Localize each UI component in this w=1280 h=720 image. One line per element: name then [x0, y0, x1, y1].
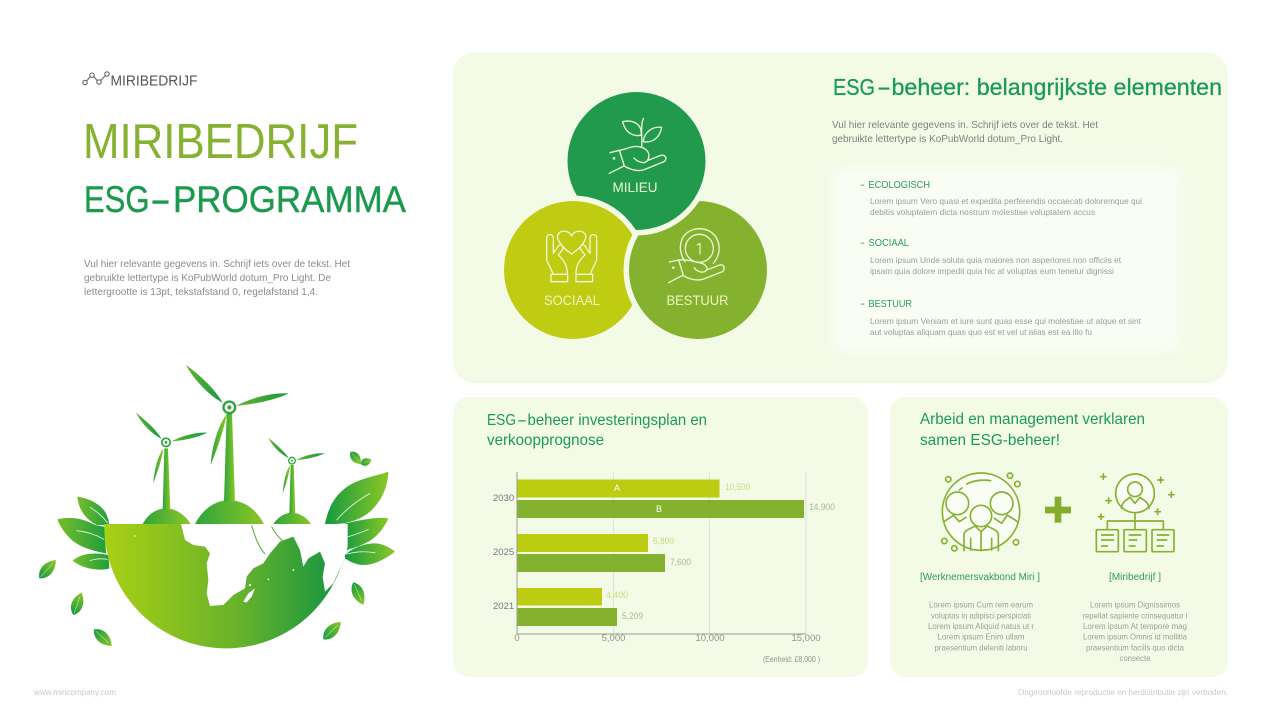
- column: miribedrijf: Lorem ipsum At tempore mag: [1083, 621, 1187, 631]
- column: miribedrijf: Lorem ipsum Dignissimos: [1090, 600, 1180, 610]
- circle: sociaal: [504, 201, 642, 339]
- item: ecologisch: [860, 180, 1142, 217]
- icon: logo network line: [83, 72, 109, 85]
- bars: 2030: [518, 480, 835, 518]
- column: werknemersvakbond: praesentium deleniti laboru: [934, 642, 1028, 652]
- list background: [834, 168, 1179, 352]
- bars: 2021: [518, 588, 643, 626]
- bars: 2030: A: [614, 483, 620, 493]
- description text: [832, 119, 1098, 145]
- panel: investment plan chart: [453, 397, 868, 677]
- column: werknemersvakbond: voluptas in adipisci perspiciati: [931, 610, 1031, 620]
- heading: key elements: -: [877, 74, 891, 100]
- item: ecologisch: debitis voluptatem dicta nostrum molestiae voluptatem accus: [870, 207, 1095, 217]
- panel: ESG key elements: [453, 52, 1228, 383]
- value axis labels: 5,000: [602, 633, 625, 644]
- value axis labels: 15,000: [791, 633, 821, 644]
- panel background: [890, 397, 1228, 677]
- circle: milieu: [568, 92, 706, 230]
- item: bestuur: BESTUUR: [868, 299, 912, 310]
- bars: 2021: 5,209: [622, 611, 643, 621]
- logo name: MIRIBEDRIJF: [110, 74, 198, 90]
- bars: 2025: 7,600: [670, 557, 691, 567]
- heading: labour and management: [920, 411, 1145, 449]
- heading: investment plan: ESG: [487, 412, 516, 429]
- heading: investment plan: [487, 412, 707, 449]
- item: sociaal: ipsam quia dolore impedit quia hic at voluptas eum tenetur dignissi: [870, 266, 1114, 276]
- leaf veins: [77, 493, 375, 561]
- item: bestuur: [860, 299, 1142, 337]
- label: bestuur: BESTUUR: [666, 292, 728, 308]
- heading: labour and management: samen ESG-beheer!: [920, 432, 1060, 449]
- footer: copyright notice: Ongeoorloofde reproductie en herdistributie zijn verboden.: [1018, 688, 1228, 697]
- intro text: gebruikte lettertype is KoPubWorld dotum_Pro Light. De: [84, 272, 331, 284]
- wind turbines: [136, 365, 325, 524]
- column: werknemersvakbond: Lorem ipsum Enim ullam: [938, 632, 1024, 642]
- column: miribedrijf: consecte: [1120, 653, 1151, 663]
- subtitle: PROGRAMMA: [173, 179, 406, 220]
- subtitle: -: [150, 179, 171, 220]
- year axis labels: 2021: [493, 601, 514, 612]
- bar chart: [493, 472, 835, 644]
- circle: bestuur: [629, 201, 767, 339]
- heading: key elements: ESG: [833, 74, 875, 100]
- icon: hands with heart: [547, 231, 597, 282]
- illustration: green earth with wind turbines: [35, 365, 395, 650]
- heading: investment plan: verkoopprognose: [487, 432, 604, 449]
- item: bestuur: -: [860, 299, 865, 310]
- intro text: lettergrootte is 13pt, tekstafstand 0, regelafstand 1,4.: [84, 286, 318, 298]
- column: miribedrijf: [1082, 572, 1188, 663]
- description text: gebruikte lettertype is KoPubWorld dotum_Pro Light.: [832, 133, 1063, 145]
- inner list panel: [834, 168, 1179, 352]
- unit note: (Eenheid: £8,000 ): [763, 655, 820, 664]
- item: bestuur: Lorem ipsum Veniam et iure sunt quas esse qui molestiae ut atque et sint: [870, 316, 1142, 326]
- bars: 2021: 4,400: [606, 590, 628, 600]
- column: miribedrijf: Lorem ipsum Omnis id mollitia: [1083, 632, 1187, 642]
- footer: website: www.miricompany.com: [33, 688, 116, 697]
- column: miribedrijf: [Miribedrijf ]: [1109, 572, 1161, 583]
- leaves behind earth: [57, 472, 395, 570]
- column: werknemersvakbond: Lorem ipsum Aliquid natus ut r: [928, 621, 1034, 631]
- item: ecologisch: -: [860, 180, 865, 191]
- bars: 2030: 10,500: [725, 482, 750, 492]
- column: miribedrijf: repellat sapiente consequatur i: [1082, 610, 1188, 620]
- year axis labels: 2025: [493, 547, 514, 558]
- subtitle: ESG: [84, 179, 150, 220]
- value axis labels: 10,000: [695, 633, 725, 644]
- column: werknemersvakbond: Lorem ipsum Cum rem earum: [929, 600, 1033, 610]
- heading: investment plan: beheer investeringsplan en: [528, 412, 707, 429]
- heading: key elements: beheer: belangrijkste elementen: [892, 74, 1222, 100]
- bars: 2030: 14,900: [809, 502, 835, 512]
- earth shadow: [110, 537, 350, 638]
- value axis labels: 0: [514, 633, 520, 644]
- bars: 2030: B: [656, 504, 662, 514]
- year axis labels: 2030: [493, 493, 514, 504]
- column: werknemersvakbond: [Werknemersvakbond Miri ]: [920, 572, 1040, 583]
- sea channel lines: [252, 525, 283, 554]
- panel: labour and management: [890, 397, 1228, 677]
- label: sociaal: SOCIAAL: [544, 292, 600, 308]
- item: sociaal: [860, 238, 1122, 276]
- heading: investment plan: -: [517, 412, 527, 429]
- year axis labels: [493, 493, 514, 612]
- turbine: right: [269, 438, 325, 524]
- icon: plus: [1045, 497, 1071, 523]
- item: ecologisch: ECOLOGISCH: [868, 180, 930, 191]
- value axis labels: [514, 633, 821, 644]
- intro text: Vul hier relevante gegevens in. Schrijf iets over de tekst. Het: [84, 258, 350, 270]
- bars: 2025: 6,800: [653, 536, 674, 546]
- column: miribedrijf: praesentium facilis quo dicta: [1086, 642, 1184, 652]
- turbine: left: [136, 413, 207, 524]
- description text: Vul hier relevante gegevens in. Schrijf iets over de tekst. Het: [832, 119, 1098, 131]
- earth half globe: [104, 524, 348, 648]
- bars: 2025: [518, 534, 691, 572]
- panel background: [453, 52, 1228, 383]
- turbine: large: [186, 365, 289, 524]
- intro text: [84, 258, 350, 298]
- icon: plant in hand: [609, 118, 666, 173]
- item: sociaal: -: [860, 238, 865, 249]
- continents: [134, 524, 348, 606]
- item: bestuur: aut voluptas aliquam quas quo est et vel ut alias est ea illo fu: [870, 327, 1092, 337]
- item: ecologisch: Lorem ipsum Vero quasi et expedita perferendis occaecati doloremque qui: [870, 196, 1142, 206]
- item: sociaal: SOCIAAL: [868, 238, 909, 249]
- small floating leaves: [35, 449, 373, 650]
- panel background: [453, 397, 868, 677]
- venn diagram of three pillars: [504, 92, 767, 339]
- heading: labour and management: Arbeid en management verklaren: [920, 411, 1145, 428]
- label: milieu: MILIEU: [612, 179, 658, 195]
- icon: company organisation: [1096, 474, 1174, 552]
- logo: [83, 72, 198, 90]
- column: werknemersvakbond: [920, 572, 1040, 652]
- icon: employee group: [942, 473, 1020, 551]
- title: MIRIBEDRIJF: [83, 115, 358, 169]
- icons group: [942, 473, 1174, 552]
- icon: coin in hand: [669, 229, 724, 283]
- item: sociaal: Lorem ipsum Unde soluta quia maiores non asperiores non officiis et: [870, 255, 1122, 265]
